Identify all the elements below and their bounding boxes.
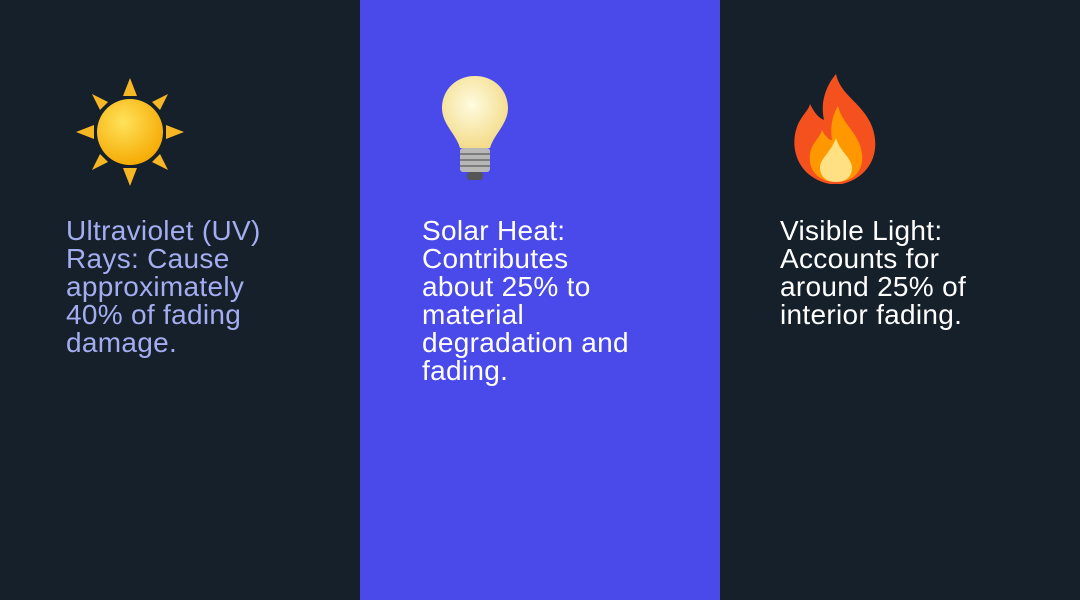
icon: sun (76, 78, 184, 186)
panel: solar heat (360, 0, 720, 600)
text: solar heat: about 25% to (422, 271, 591, 302)
text: ultraviolet (66, 215, 261, 358)
text: solar heat: material (422, 299, 524, 330)
text: solar heat: Solar Heat: (422, 215, 565, 246)
text: visible light: interior fading. (780, 299, 962, 330)
text: ultraviolet: Rays: Cause (66, 243, 230, 274)
text: ultraviolet: approximately (66, 271, 244, 302)
text: visible light: Accounts for (780, 243, 939, 274)
icon: fire (794, 74, 876, 184)
text: solar heat: Contributes (422, 243, 568, 274)
text: ultraviolet: 40% of fading (66, 299, 241, 330)
text: visible light (780, 215, 966, 330)
text: visible light: Visible Light: (780, 215, 942, 246)
text: solar heat: degradation and (422, 327, 629, 358)
text: ultraviolet: damage. (66, 327, 177, 358)
icon: light bulb (442, 76, 508, 180)
panel: ultraviolet (0, 0, 360, 600)
text: ultraviolet: Ultraviolet (UV) (66, 215, 261, 246)
text: solar heat: fading. (422, 355, 508, 386)
panel: visible light (720, 0, 1080, 600)
text: solar heat (422, 215, 629, 386)
text: visible light: around 25% of (780, 271, 966, 302)
